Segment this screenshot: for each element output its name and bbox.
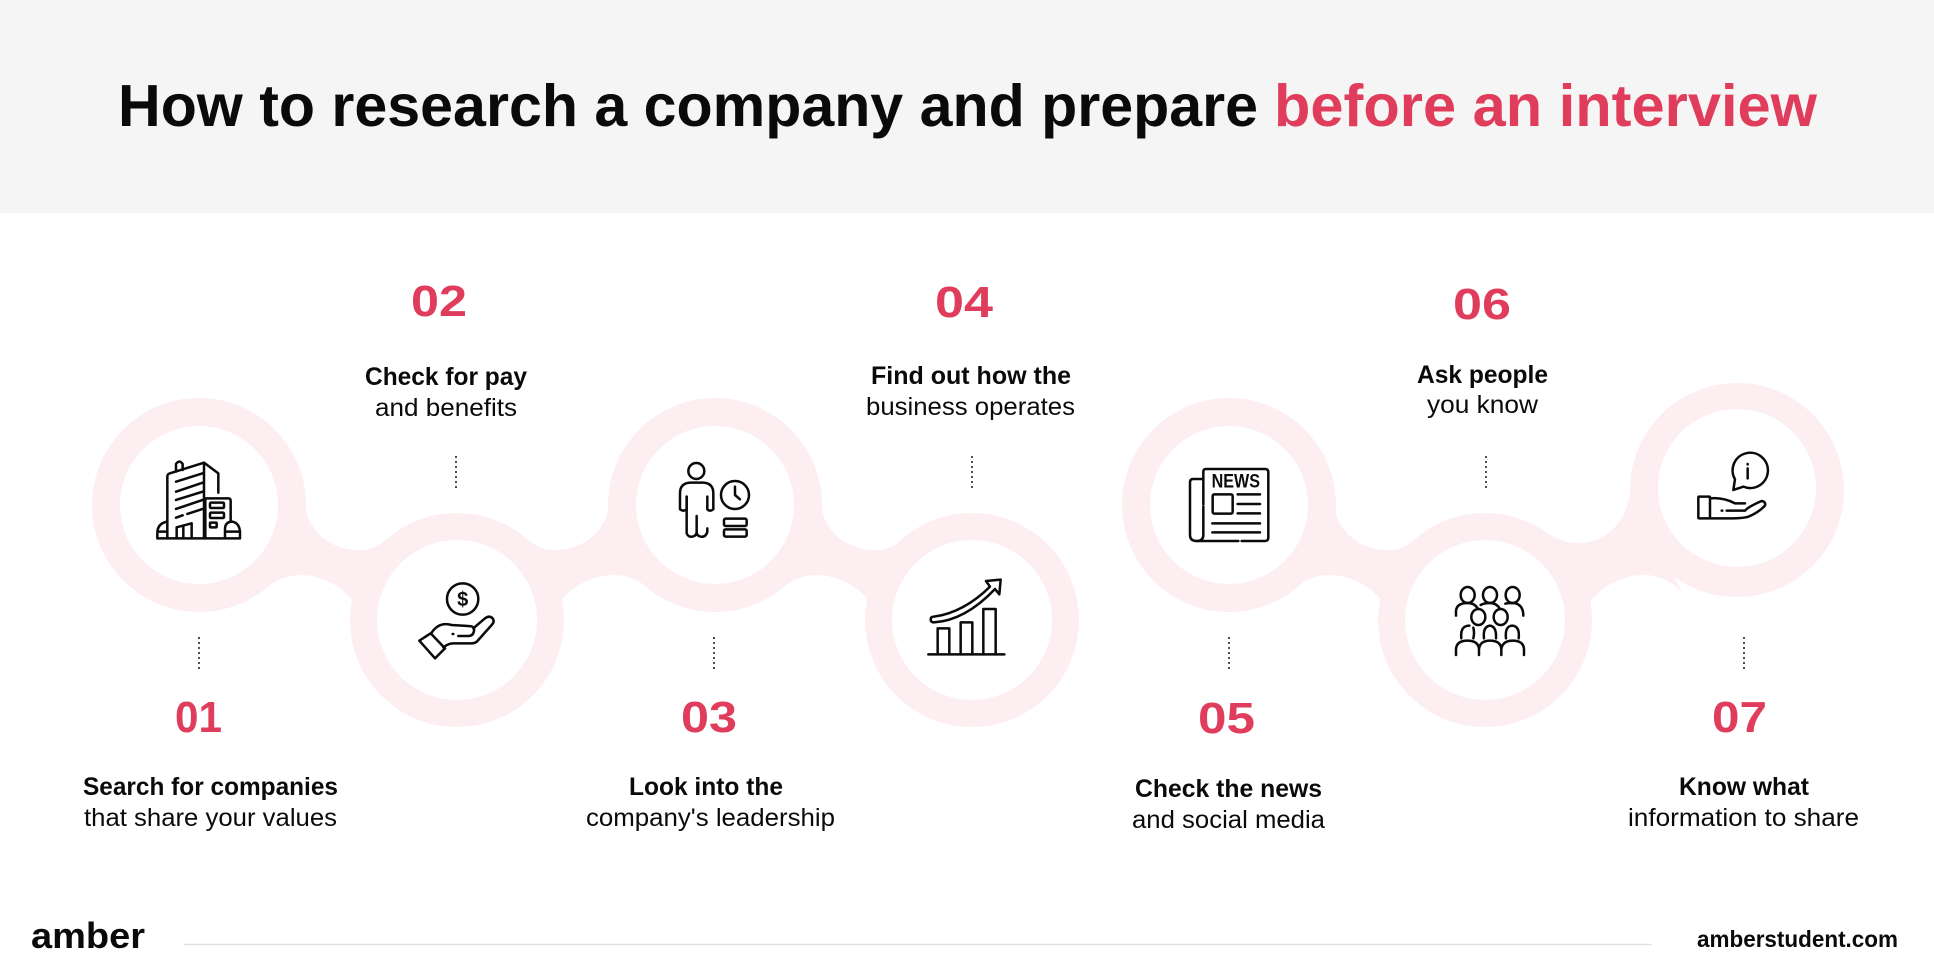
step 06: 06 [1453,280,1511,329]
step 06: you know [1427,391,1539,419]
step 07: Know what [1679,773,1810,801]
step 01 [83,693,338,832]
step 01: Search for companies [83,773,338,801]
icon: hand holding dollar coin [419,583,494,658]
connector dots [199,456,1744,670]
step 04: 04 [935,278,994,327]
step 06 [1417,280,1548,419]
step 05: Check the news [1135,775,1322,803]
title [118,73,1817,139]
step 07 [1628,693,1859,832]
step 02: Check for pay [365,363,527,391]
title: before an interview [1274,73,1817,139]
icon: hand with info bubble [1698,453,1768,518]
icon: office building [157,462,240,538]
wavy ring path [92,383,1844,727]
step 04: business operates [866,393,1075,421]
step 04 [866,278,1075,421]
website: amberstudent.com [1697,926,1898,952]
step 02: and benefits [375,394,517,422]
step 05: 05 [1198,694,1255,743]
step 07: information to share [1628,804,1859,832]
step 02: 02 [411,277,467,326]
step 01: that share your values [84,804,337,832]
icon: growth chart [928,580,1004,654]
title: How to research a company and prepare [118,73,1258,139]
icon: group of people [1456,587,1524,655]
logo: amber: amber [31,915,145,956]
step 03: 03 [681,693,737,742]
icon: person and clock [680,463,749,537]
step 06: Ask people [1417,361,1548,389]
step 05 [1132,694,1325,834]
icon: newspaper [1190,469,1268,541]
icon: newspaper: NEWS [1212,472,1260,493]
step 07: 07 [1712,693,1767,742]
step 04: Find out how the [871,362,1071,390]
step 03 [586,693,835,832]
step 03: Look into the [629,773,783,801]
step 05: and social media [1132,806,1325,834]
header band [0,0,1934,213]
step 01: 01 [175,693,222,742]
step 03: company's leadership [586,804,835,832]
step 02 [365,277,527,422]
icon: hand holding dollar coin: $ [457,589,468,611]
